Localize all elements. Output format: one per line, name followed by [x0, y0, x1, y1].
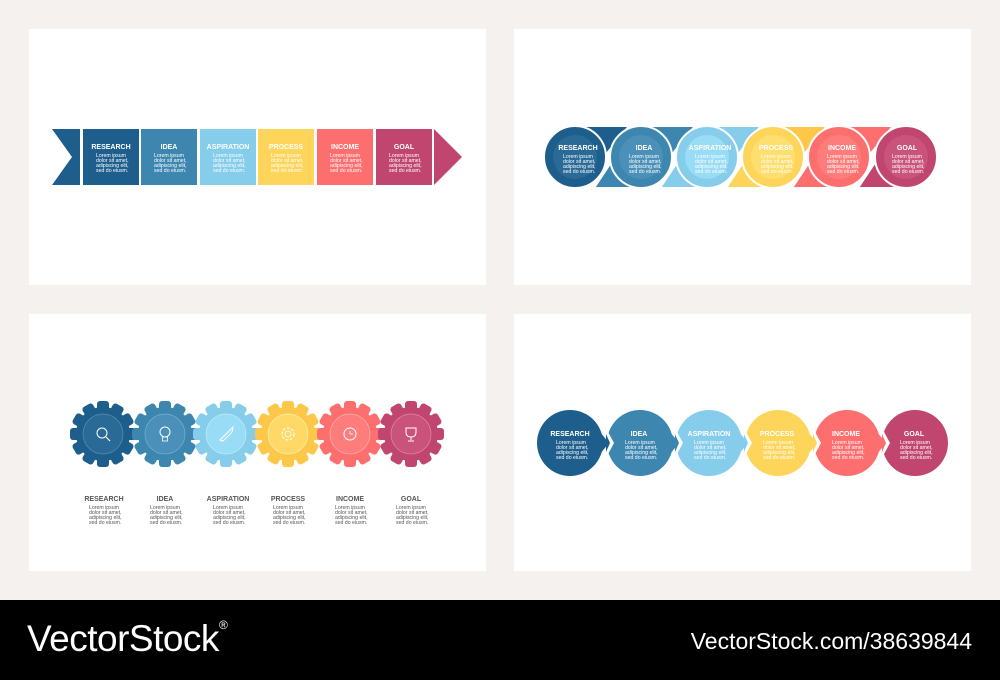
arrow circle labels: GOAL: [904, 431, 925, 438]
step: aspiration: [676, 126, 738, 188]
gear labels: dolor sit amet,: [273, 510, 306, 516]
gear labels: sed do eiusm.: [150, 520, 182, 526]
wave labels: [558, 145, 925, 175]
step: income: adipiscing elit,: [330, 163, 363, 169]
arrow circle labels: PROCESS: [760, 431, 794, 438]
gear: goal: [378, 401, 444, 467]
step: idea: Lorem ipsum: [154, 153, 184, 159]
step: aspiration: ASPIRATION: [207, 144, 249, 151]
wave labels: Lorem ipsum: [827, 154, 857, 160]
wave labels: dolor sit amet,: [892, 159, 925, 165]
arrow circle labels: adipiscing elit,: [625, 450, 658, 456]
gear labels: [84, 496, 429, 526]
wave labels: adipiscing elit,: [563, 164, 596, 170]
arrow circle labels: sed do eiusm.: [694, 455, 726, 461]
arrow circle labels: Lorem ipsum: [763, 440, 793, 446]
wave labels: sed do eiusm.: [761, 169, 793, 175]
step: idea: [607, 410, 679, 476]
panel: gears: [29, 314, 486, 571]
wave bands: [575, 126, 906, 188]
wave labels: dolor sit amet,: [761, 159, 794, 165]
wave labels: sed do eiusm.: [695, 169, 727, 175]
step: research: adipiscing elit,: [96, 163, 129, 169]
wave labels: INCOME: [828, 145, 856, 152]
gear labels: sed do eiusm.: [273, 520, 305, 526]
step: research: Lorem ipsum: [96, 153, 126, 159]
gear labels: dolor sit amet,: [150, 510, 183, 516]
chart: gears: [70, 401, 444, 467]
gear labels: RESEARCH: [84, 496, 124, 503]
step: goal: adipiscing elit,: [389, 163, 422, 169]
wave labels: adipiscing elit,: [629, 164, 662, 170]
step: aspiration: Lorem ipsum: [213, 153, 243, 159]
wave labels: ASPIRATION: [689, 145, 731, 152]
gear labels: GOAL: [401, 496, 422, 503]
arrow circle labels: Lorem ipsum: [694, 440, 724, 446]
wave labels: adipiscing elit,: [892, 164, 925, 170]
panel: arrow boxes: [29, 29, 486, 285]
wave labels: sed do eiusm.: [827, 169, 859, 175]
step: research: dolor sit amet,: [96, 158, 129, 164]
gear labels: adipiscing elit,: [335, 515, 368, 521]
wave labels: Lorem ipsum: [563, 154, 593, 160]
step: idea: dolor sit amet,: [154, 158, 187, 164]
gear labels: sed do eiusm.: [89, 520, 121, 526]
arrow circle labels: dolor sit amet,: [900, 445, 933, 451]
arrow circle labels: sed do eiusm.: [832, 455, 864, 461]
arrow circle labels: adipiscing elit,: [763, 450, 796, 456]
wave labels: dolor sit amet,: [563, 159, 596, 165]
gear labels: ASPIRATION: [207, 496, 249, 503]
step: goal: [376, 129, 432, 185]
arrow circle labels: [550, 431, 933, 461]
step: aspiration: [200, 129, 256, 185]
wave labels: sed do eiusm.: [892, 169, 924, 175]
arrow circle labels: sed do eiusm.: [763, 455, 795, 461]
gear: idea: [132, 401, 198, 467]
step: idea: [610, 126, 672, 188]
wave labels: GOAL: [897, 145, 918, 152]
arrow circle labels: Lorem ipsum: [625, 440, 655, 446]
wave labels: dolor sit amet,: [827, 159, 860, 165]
wave labels: Lorem ipsum: [695, 154, 725, 160]
gear labels: dolor sit amet,: [89, 510, 122, 516]
wave labels: adipiscing elit,: [761, 164, 794, 170]
gear labels: dolor sit amet,: [396, 510, 429, 516]
gear: aspiration: [193, 401, 259, 467]
step: aspiration: [676, 410, 748, 476]
gear labels: Lorem ipsum: [273, 505, 303, 511]
wave labels: Lorem ipsum: [629, 154, 659, 160]
step: process: [258, 129, 314, 185]
arrow circle labels: dolor sit amet,: [832, 445, 865, 451]
arrow circle labels: adipiscing elit,: [900, 450, 933, 456]
step: research: sed do eiusm.: [96, 168, 128, 174]
step: process: Lorem ipsum: [271, 153, 301, 159]
step: income: INCOME: [331, 144, 359, 151]
arrow circle labels: adipiscing elit,: [832, 450, 865, 456]
wave labels: dolor sit amet,: [695, 159, 728, 165]
step: process: PROCESS: [269, 144, 303, 151]
gear labels: adipiscing elit,: [150, 515, 183, 521]
gear labels: adipiscing elit,: [273, 515, 306, 521]
arrow circle labels: dolor sit amet,: [625, 445, 658, 451]
arrow circle labels: adipiscing elit,: [694, 450, 727, 456]
step: goal: dolor sit amet,: [389, 158, 422, 164]
gear labels: INCOME: [336, 496, 364, 503]
step: research: RESEARCH: [91, 144, 131, 151]
arrow circle labels: dolor sit amet,: [694, 445, 727, 451]
gear labels: dolor sit amet,: [213, 510, 246, 516]
step: income: dolor sit amet,: [330, 158, 363, 164]
gear labels: Lorem ipsum: [213, 505, 243, 511]
step: research: [544, 126, 606, 188]
wave labels: sed do eiusm.: [563, 169, 595, 175]
step: income: [808, 126, 870, 188]
step: goal: GOAL: [394, 144, 415, 151]
gear: process: [255, 401, 321, 467]
arrow circle labels: sed do eiusm.: [625, 455, 657, 461]
arrow circle labels: dolor sit amet,: [763, 445, 796, 451]
arrow circle labels: INCOME: [832, 431, 860, 438]
gear labels: Lorem ipsum: [335, 505, 365, 511]
gear labels: PROCESS: [271, 496, 305, 503]
wave labels: Lorem ipsum: [761, 154, 791, 160]
step: process: dolor sit amet,: [271, 158, 304, 164]
arrow circle labels: IDEA: [631, 431, 647, 438]
step: process: sed do eiusm.: [271, 168, 303, 174]
step: income: sed do eiusm.: [330, 168, 362, 174]
gear labels: sed do eiusm.: [213, 520, 245, 526]
arrow circle labels: Lorem ipsum: [556, 440, 586, 446]
step: idea: sed do eiusm.: [154, 168, 186, 174]
wave labels: sed do eiusm.: [629, 169, 661, 175]
gear labels: Lorem ipsum: [150, 505, 180, 511]
step: process: [742, 126, 804, 188]
arrow circle labels: Lorem ipsum: [900, 440, 930, 446]
step: idea: [141, 129, 197, 185]
step: income: Lorem ipsum: [330, 153, 360, 159]
gear labels: Lorem ipsum: [89, 505, 119, 511]
gear labels: IDEA: [157, 496, 173, 503]
step: process: [745, 410, 817, 476]
gear labels: sed do eiusm.: [396, 520, 428, 526]
arrow circle labels: dolor sit amet,: [556, 445, 589, 451]
arrow circle labels: RESEARCH: [550, 431, 590, 438]
gear labels: adipiscing elit,: [396, 515, 429, 521]
arrow circle labels: sed do eiusm.: [900, 455, 932, 461]
arrow circle labels: sed do eiusm.: [556, 455, 588, 461]
step: research: [83, 129, 139, 185]
wave labels: IDEA: [636, 145, 652, 152]
footer bar: [0, 600, 1000, 680]
step: process: adipiscing elit,: [271, 163, 304, 169]
wave labels: PROCESS: [759, 145, 793, 152]
chart: wave circles: [544, 126, 937, 188]
panel: arrow circles: [514, 314, 971, 571]
gear labels: dolor sit amet,: [335, 510, 368, 516]
wave labels: Lorem ipsum: [892, 154, 922, 160]
wave labels: RESEARCH: [558, 145, 598, 152]
wave labels: adipiscing elit,: [695, 164, 728, 170]
gear: research: [70, 401, 136, 467]
step: goal: [875, 126, 937, 188]
wave labels: dolor sit amet,: [629, 159, 662, 165]
panel: wave circles: [514, 29, 971, 285]
gear labels: sed do eiusm.: [335, 520, 367, 526]
gear labels: adipiscing elit,: [89, 515, 122, 521]
footer url: VectorStock.com/38639844: [691, 628, 972, 654]
arrow circle labels: adipiscing elit,: [556, 450, 589, 456]
gear labels: Lorem ipsum: [396, 505, 426, 511]
step: research: [537, 410, 609, 476]
step: goal: [882, 410, 948, 476]
arrow circle labels: ASPIRATION: [688, 431, 730, 438]
gear labels: adipiscing elit,: [213, 515, 246, 521]
footer logo: VectorStock®: [27, 618, 227, 659]
chart: arrow process: [52, 129, 462, 185]
step: idea: IDEA: [161, 144, 177, 151]
chart: arrow circles: [537, 410, 948, 476]
step: aspiration: dolor sit amet,: [213, 158, 246, 164]
step: idea: adipiscing elit,: [154, 163, 187, 169]
step: aspiration: adipiscing elit,: [213, 163, 246, 169]
step: goal: Lorem ipsum: [389, 153, 419, 159]
arrow circle labels: Lorem ipsum: [832, 440, 862, 446]
arrow head: [434, 129, 462, 185]
arrow tail: [52, 129, 80, 185]
step: goal: sed do eiusm.: [389, 168, 421, 174]
gear: income: [317, 401, 383, 467]
step: income: [317, 129, 373, 185]
wave labels: adipiscing elit,: [827, 164, 860, 170]
step: income: [814, 410, 886, 476]
step: aspiration: sed do eiusm.: [213, 168, 245, 174]
